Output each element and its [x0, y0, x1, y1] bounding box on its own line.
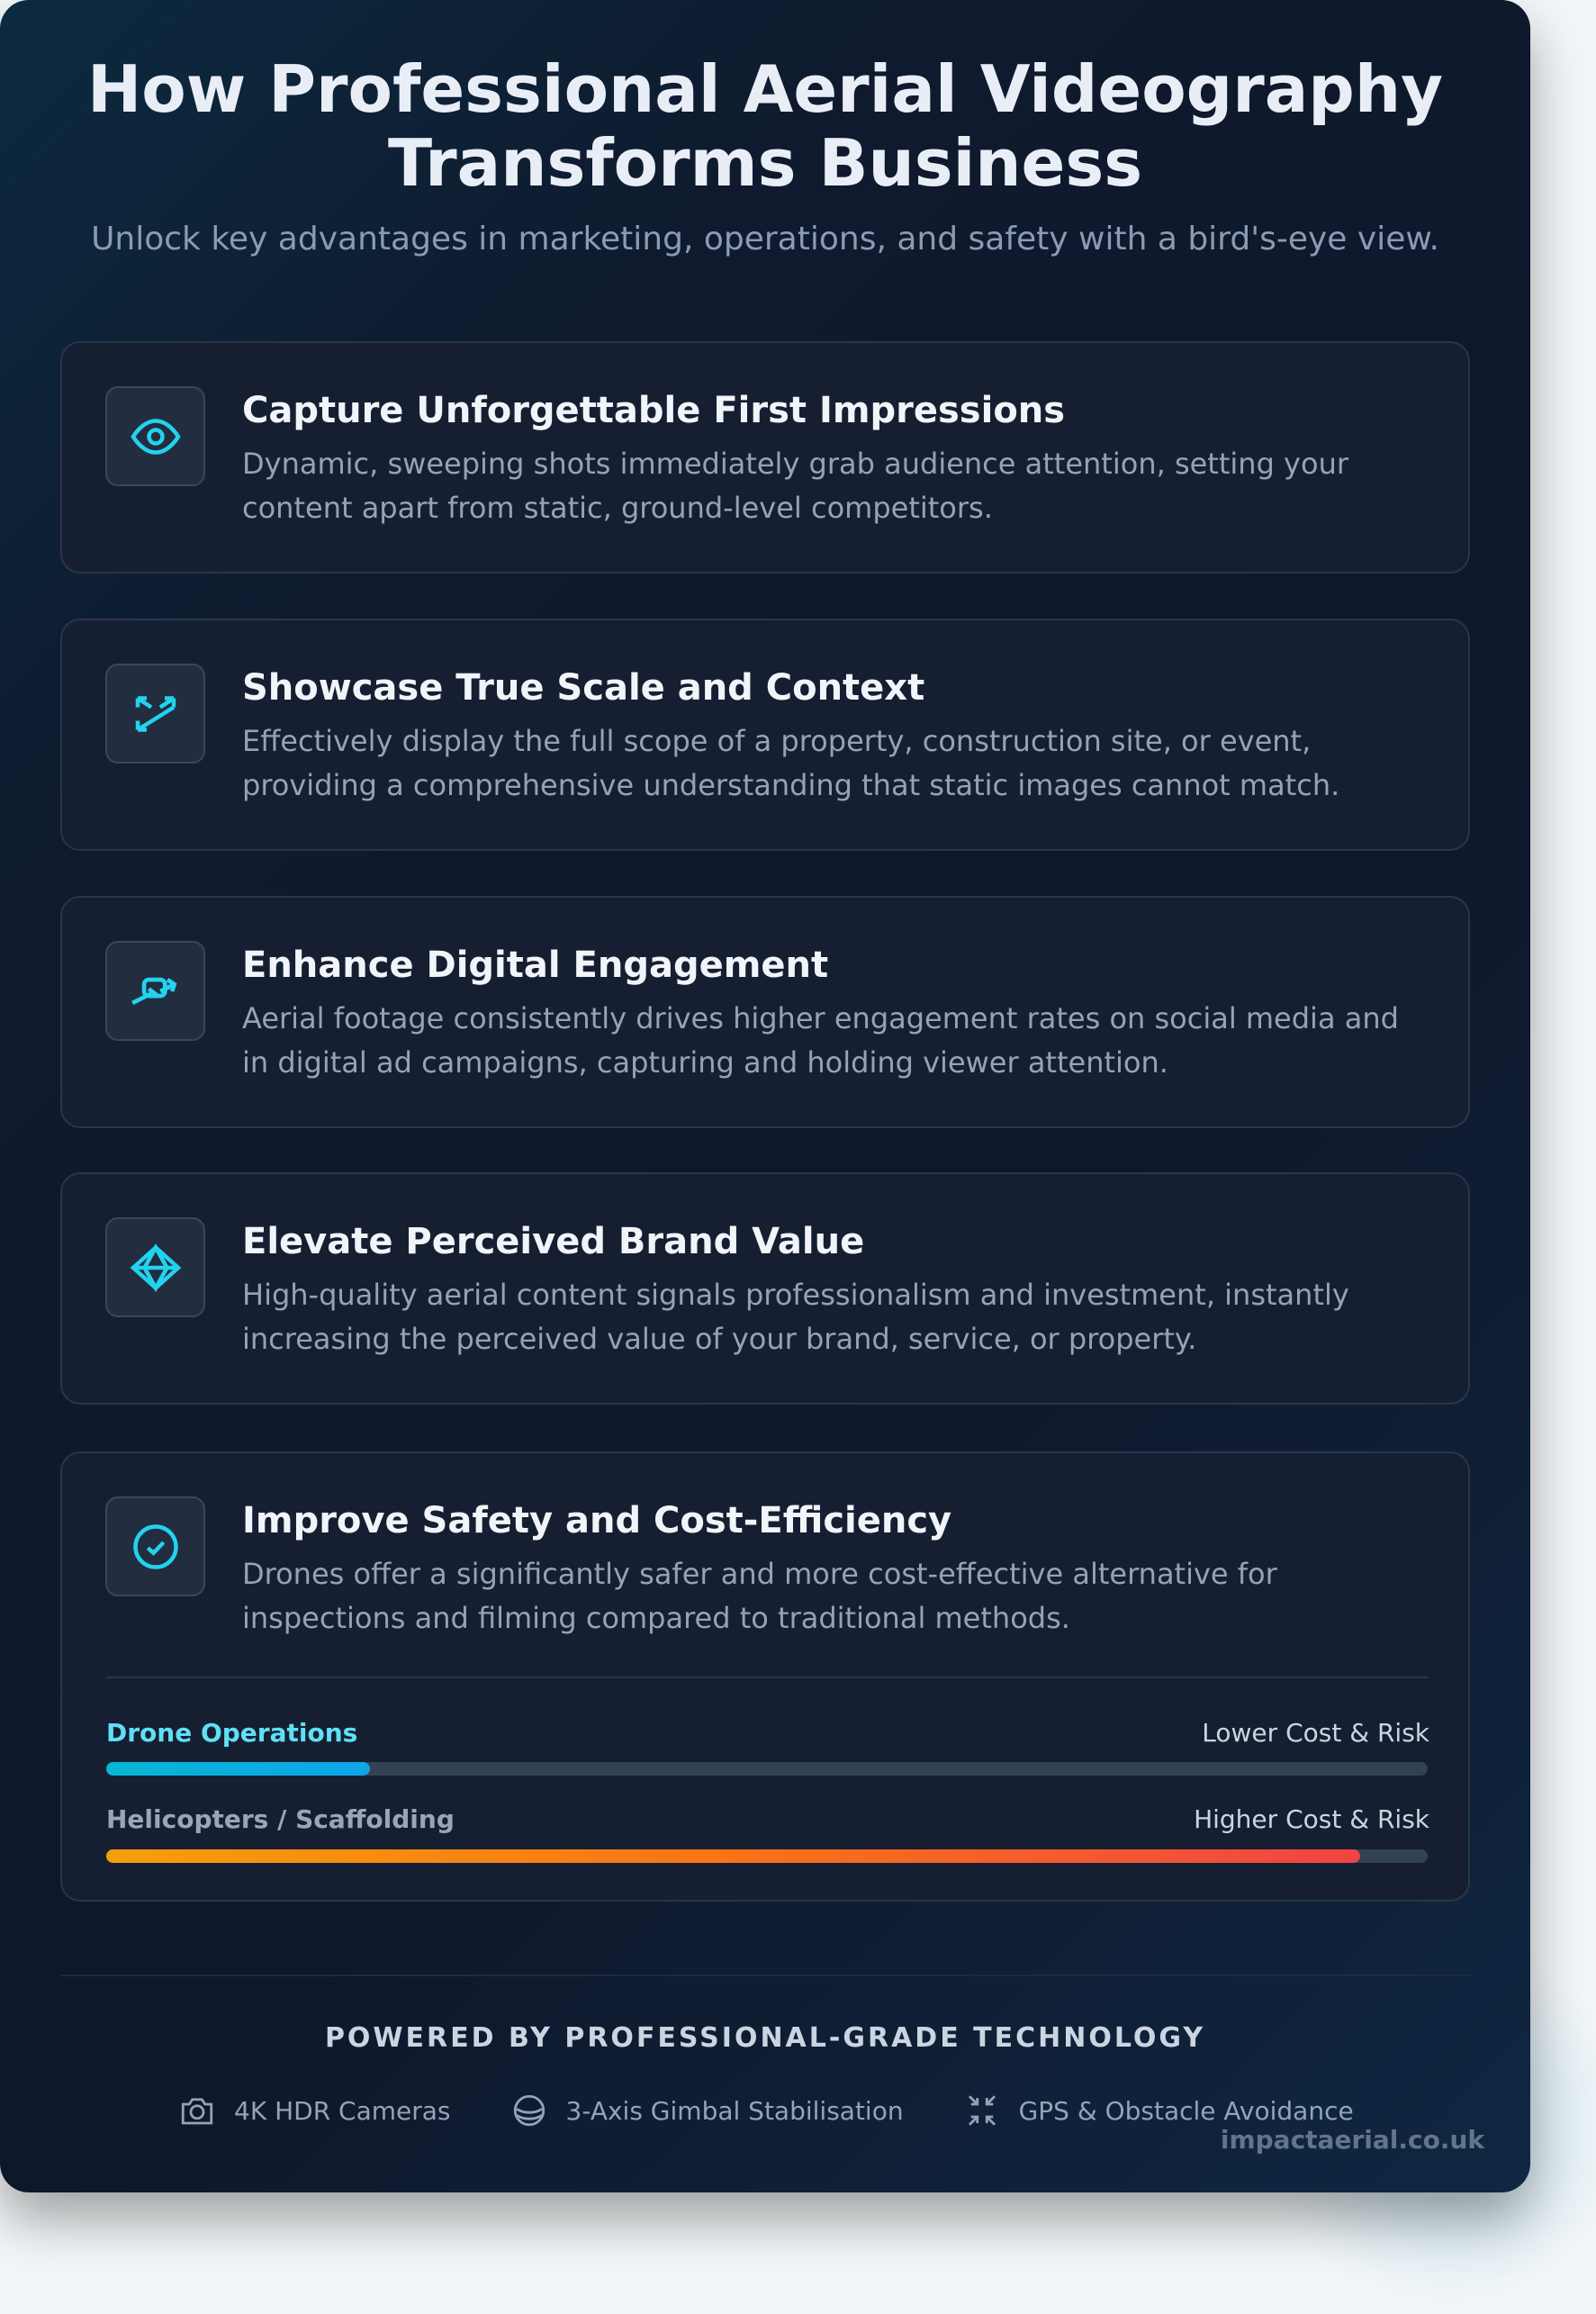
feature: gps: GPS & Obstacle Avoidance — [1019, 2096, 1354, 2125]
bar: drone — [106, 1762, 1428, 1776]
label: helicopters: Helicopters / Scaffolding — [106, 1804, 455, 1834]
heading: Improve Safety and Cost-Efficiency — [242, 1500, 951, 1541]
footer heading: POWERED BY PROFESSIONAL-GRADE TECHNOLOGY — [325, 2022, 1205, 2054]
label: higher cost: Higher Cost & Risk — [1194, 1804, 1429, 1834]
body text: Dynamic, sweeping shots immediately grab audience attention, setting your content apart from static, ground-level competitors. — [242, 447, 1348, 525]
heading: Capture Unforgettable First Impressions — [242, 390, 1065, 431]
panel: engagement — [60, 896, 1470, 1128]
panel: brand value — [60, 1172, 1470, 1405]
body text: High-quality aerial content signals professionalism and investment, instantly increasing the perceived value of your brand, service, or property. — [242, 1278, 1349, 1356]
icon: expand arrows — [105, 664, 205, 764]
panel: scale — [60, 619, 1470, 851]
title: How Professional Aerial Videography — [87, 51, 1443, 127]
title — [87, 51, 1443, 201]
footer features — [182, 2094, 1354, 2127]
feature: gimbal: 3-Axis Gimbal Stabilisation — [566, 2096, 904, 2125]
subtitle: Unlock key advantages in marketing, operations, and safety with a bird's-eye view. — [91, 221, 1439, 258]
bar chart: comparison — [106, 1718, 1429, 1863]
label: drone: Drone Operations — [106, 1718, 357, 1748]
icon: check circle — [105, 1496, 205, 1596]
panel: safety and cost — [60, 1451, 1470, 1902]
panel: first impressions — [60, 341, 1470, 574]
heading: Elevate Perceived Brand Value — [242, 1221, 864, 1262]
heading: Showcase True Scale and Context — [242, 667, 924, 709]
body text: Drones offer a significantly safer and more cost-effective alternative for inspections and filming compared to traditional methods. — [242, 1557, 1277, 1635]
heading: Enhance Digital Engagement — [242, 945, 828, 986]
title: Transforms Business — [388, 125, 1142, 201]
label: lower cost: Lower Cost & Risk — [1202, 1718, 1429, 1748]
icon: diamond — [105, 1217, 205, 1317]
feature: cameras: 4K HDR Cameras — [234, 2096, 451, 2125]
website: impactaerial.co.uk — [1221, 2125, 1484, 2155]
bar: helicopters — [106, 1849, 1428, 1863]
icon: engagement — [105, 941, 205, 1041]
body text: Aerial footage consistently drives higher engagement rates on social media and in digital ad campaigns, capturing and holding viewer attention. — [242, 1001, 1399, 1080]
icon: eye — [105, 386, 205, 486]
body text: Effectively display the full scope of a property, construction site, or event, providing a comprehensive understanding that static images cannot match. — [242, 724, 1339, 802]
